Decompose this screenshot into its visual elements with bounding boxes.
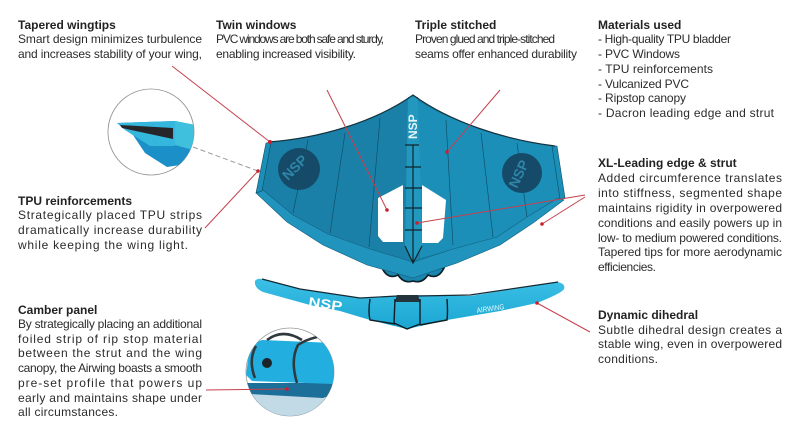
- straps: [252, 334, 317, 383]
- inflated tube: [246, 340, 334, 384]
- valve: [262, 358, 272, 368]
- text: materials used: - High-quality TPU bladder: [598, 32, 731, 46]
- wing canopy: [256, 95, 563, 278]
- leading edge: [256, 190, 564, 278]
- text: materials used: - TPU reinforcements: [598, 62, 713, 76]
- detail circle: wingtip: [108, 89, 195, 175]
- text: materials used: - PVC Windows: [598, 47, 680, 61]
- wing: side view: [255, 279, 564, 329]
- text: twin windows: enabling increased visibility.: [216, 47, 356, 61]
- panel seams: [293, 118, 527, 247]
- text: camber panel: By strategically placing an additional: [18, 317, 202, 331]
- text: twin windows: Twin windows: [216, 18, 297, 32]
- text: twin windows: [216, 18, 384, 61]
- text: dynamic dihedral: conditions.: [598, 352, 658, 366]
- bottom handles: [382, 268, 444, 282]
- text: TPU reinforcements: dramatically increase durability: [18, 223, 202, 237]
- left logo circle: NSP: [279, 151, 310, 183]
- text: tapered wingtips: Tapered wingtips: [18, 18, 116, 32]
- text: XL-leading edge and strut: Tapered tips for more aerodynamic: [598, 245, 782, 259]
- text: materials used: [598, 18, 775, 120]
- text: dynamic dihedral: Dynamic dihedral: [598, 308, 698, 322]
- text: tapered wingtips: and increases stability of your wing,: [18, 47, 202, 61]
- wing: front view: [256, 95, 565, 282]
- left wingtip strut: [256, 142, 271, 193]
- strut stitching: [405, 145, 422, 263]
- text: materials used: - Ripstop canopy: [598, 91, 686, 105]
- NSP logo: NSP: [308, 294, 344, 314]
- text: TPU reinforcements: [17, 194, 202, 252]
- text: twin windows: PVC windows are both safe and sturdy,: [216, 32, 384, 46]
- right wingtip strut: [552, 146, 565, 199]
- text: dynamic dihedral: Subtle dihedral design creates a: [598, 323, 782, 337]
- dashed pointer: [193, 147, 258, 171]
- text: materials used: Materials used: [598, 18, 681, 32]
- text: XL-leading edge and strut: maintains rigidity in overpowered: [598, 201, 782, 215]
- text: XL-leading edge and strut: efficiencies.: [598, 260, 656, 274]
- text: camber panel: pre-set profile that powers up: [18, 376, 202, 390]
- top edge: [269, 95, 555, 146]
- AIRWING label: AIRWING: [476, 302, 505, 315]
- centre strut: [405, 97, 422, 262]
- text: XL-leading edge and strut: XL-Leading edge & strut: [598, 156, 737, 170]
- segments: [369, 299, 448, 329]
- text: materials used: - Dacron leading edge and strut: [598, 106, 775, 120]
- text: TPU reinforcements: Strategically placed TPU strips: [18, 208, 202, 222]
- text: materials used: - Vulcanized PVC: [598, 77, 689, 91]
- text: camber panel: canopy, the Airwing boasts a smooth: [18, 361, 202, 375]
- text: triple stitched: [415, 18, 577, 61]
- text: camber panel: Camber panel: [18, 303, 97, 317]
- text: dynamic dihedral: stable wing, even in overpowered: [598, 337, 782, 351]
- text: XL-leading edge and strut: Added circumference translates: [598, 171, 782, 185]
- text: XL-leading edge and strut: low- to medium powered conditions.: [598, 231, 782, 245]
- text: dynamic dihedral: [598, 308, 782, 366]
- text: triple stitched: Triple stitched: [415, 18, 496, 32]
- text: TPU reinforcements: while keeping the wing light.: [17, 238, 188, 252]
- detail circle: camber panel: [246, 328, 334, 416]
- right logo circle: NSP: [505, 157, 532, 190]
- text: XL-leading edge and strut: [598, 156, 782, 274]
- fabric: [252, 394, 326, 416]
- text: TPU reinforcements: TPU reinforcements: [18, 194, 132, 208]
- text: triple stitched: seams offer enhanced durability: [415, 47, 577, 61]
- inflated tube: [255, 279, 564, 329]
- red pointer lines: [172, 66, 590, 390]
- text: camber panel: all circumstances.: [18, 405, 118, 419]
- wingtip body: [117, 121, 195, 167]
- windows: [378, 185, 446, 243]
- right logo circle: [502, 153, 542, 193]
- text: camber panel: [18, 303, 202, 419]
- top edge line: [262, 279, 558, 298]
- text: XL-leading edge and strut: conditions and easily powers up in: [598, 216, 782, 230]
- text: camber panel: early and maintains shape under: [18, 391, 202, 405]
- strut seat: [395, 295, 420, 302]
- text: tapered wingtips: [18, 18, 202, 61]
- text: tapered wingtips: Smart design minimizes turbulence: [18, 32, 202, 46]
- text: camber panel: foiled strip of rip stop material: [18, 332, 202, 346]
- text: XL-leading edge and strut: into stiffness, segmented shape: [598, 186, 782, 200]
- NSP logo on strut: NSP: [406, 114, 420, 139]
- left logo circle: [278, 148, 320, 190]
- text: camber panel: between the strut and the wing: [18, 346, 202, 360]
- text: triple stitched: Proven glued and triple-stitched: [415, 32, 555, 46]
- red pointer dots: [256, 140, 544, 391]
